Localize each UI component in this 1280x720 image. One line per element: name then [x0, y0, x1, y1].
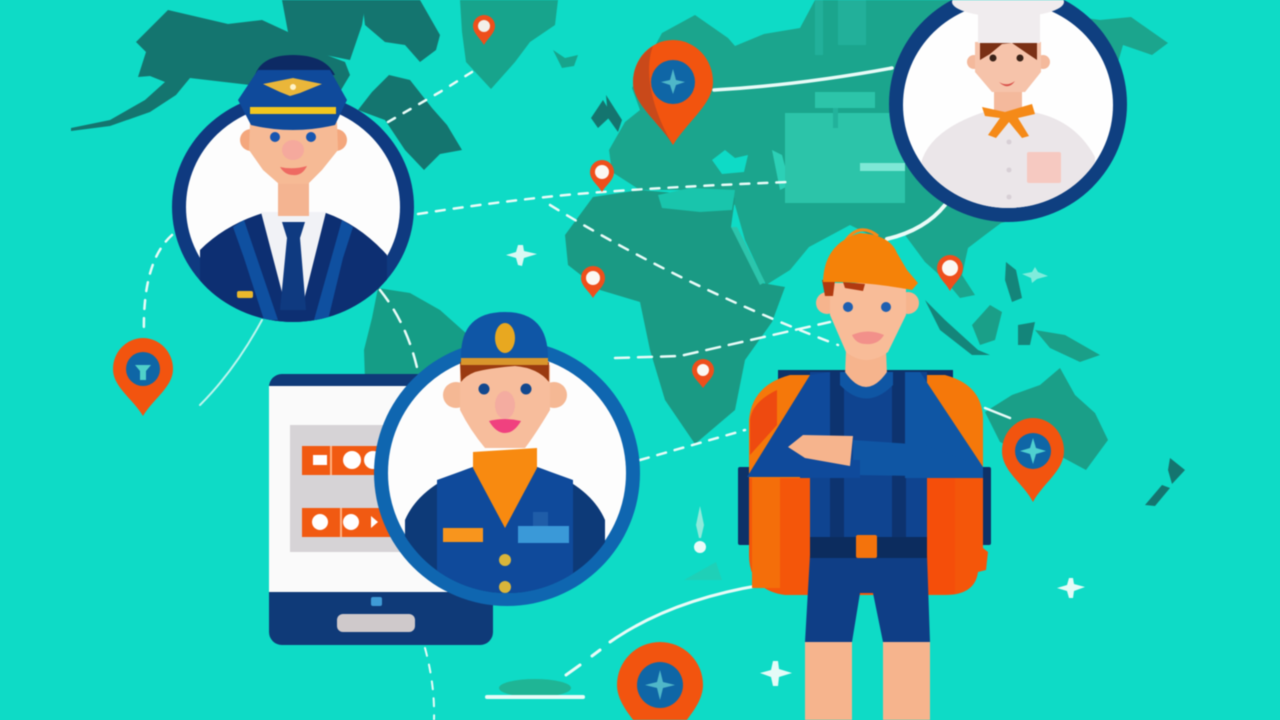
pin: left [113, 338, 173, 416]
backpacker: belt [810, 537, 927, 558]
stewardess: hair [460, 362, 549, 382]
icon: plane west [506, 245, 537, 266]
route: pilot across africa to asia [418, 182, 790, 214]
stewardess: cap [461, 312, 548, 365]
map: north america [71, 0, 462, 170]
route: tablet downward [425, 648, 434, 720]
pilot: jacket [200, 212, 387, 325]
backpacker: hair fringe [822, 280, 865, 296]
map: black sea [712, 150, 748, 174]
portrait: pilot [172, 55, 414, 325]
backpacker: backpack [749, 375, 988, 595]
chef: hat [952, 0, 1064, 43]
map: australia [985, 368, 1108, 470]
map: mediterranean [658, 188, 735, 212]
map: southeast asia islands [925, 262, 1100, 362]
route: big pin to chef [714, 68, 892, 90]
pin: bottom [617, 642, 703, 720]
pilot: white disc [186, 104, 400, 310]
icon: plane east faded [1022, 267, 1048, 283]
route: pilot to greenland [388, 72, 472, 122]
map: new zealand [1145, 458, 1185, 506]
tablet: grey panel [290, 425, 420, 552]
map: caspian sea [772, 150, 790, 190]
route: left pin to pilot [200, 320, 262, 405]
chef: coat [921, 112, 1095, 215]
map: red sea [731, 227, 765, 285]
chef: ring [889, 0, 1127, 222]
route: chef to backpacker [887, 205, 945, 239]
pilot: neck and face [240, 122, 347, 216]
pin: australia [1002, 418, 1064, 502]
route: diagonal across africa [550, 205, 838, 345]
tablet: orange row one [302, 446, 402, 475]
backpacker: arms [747, 372, 983, 478]
map: greenland and iceland [460, 0, 578, 89]
stewardess: ring [374, 340, 640, 606]
chef: white disc [903, 2, 1113, 208]
pilot: ring [172, 92, 414, 322]
icon: faded traveller [684, 506, 722, 580]
chef: scarf [982, 104, 1035, 138]
backpacker: collar [840, 372, 893, 398]
route: across east africa [615, 322, 830, 358]
pilot: cap [238, 55, 347, 130]
map: south america [364, 288, 472, 380]
backpacker: face [816, 283, 919, 360]
stewardess: scarf [473, 448, 537, 528]
icon: bottom island with white line [485, 679, 585, 699]
backpacker: torso [810, 372, 927, 557]
route: bottom pin arc [566, 585, 762, 675]
icon: plane south [1057, 578, 1085, 598]
pin: west africa small [581, 266, 605, 298]
portrait: chef [889, 0, 1127, 222]
backpacker [738, 230, 991, 720]
tablet: screen [269, 386, 493, 592]
portrait: stewardess [374, 312, 640, 606]
chef: neck and face [967, 42, 1050, 112]
pin: large europe [633, 40, 713, 145]
route: stewardess to backpack [640, 430, 745, 460]
route: east of backpack [985, 408, 1010, 418]
route: pilot to left pin [144, 235, 172, 335]
tablet: home button [337, 614, 415, 632]
backpacker: backpack rear straps [738, 370, 991, 545]
backpacker: belt buckle [856, 535, 877, 558]
stewardess: white disc [388, 354, 626, 592]
world map [71, 0, 1185, 506]
backpacker: shorts [805, 555, 930, 642]
backpacker: cap [823, 233, 918, 290]
stewardess: face [443, 365, 567, 448]
backpacker: hand [788, 435, 853, 466]
tablet: orange row two [302, 508, 402, 537]
stewardess: jacket [405, 467, 605, 600]
map: eurasia [609, 0, 1168, 298]
tablet: camera dot [371, 597, 382, 606]
pin: southeast asia small [937, 255, 963, 291]
map: africa [565, 190, 785, 444]
icon: plane bottom [760, 661, 792, 686]
backpacker: hoop on cap [846, 230, 878, 240]
pin: greenland small [473, 15, 495, 45]
tablet [269, 374, 493, 645]
route: south america line [380, 290, 418, 372]
map: scandinavia islands [591, 95, 622, 132]
map: faded central building [785, 92, 905, 203]
chef: hair [980, 42, 1037, 60]
pin: east africa small [692, 359, 714, 388]
backpacker: legs [805, 640, 930, 720]
map: faded northern towers [815, 0, 866, 55]
pin: spain small [590, 160, 614, 192]
flight routes [144, 68, 1010, 720]
backpacker: neck [845, 350, 887, 388]
